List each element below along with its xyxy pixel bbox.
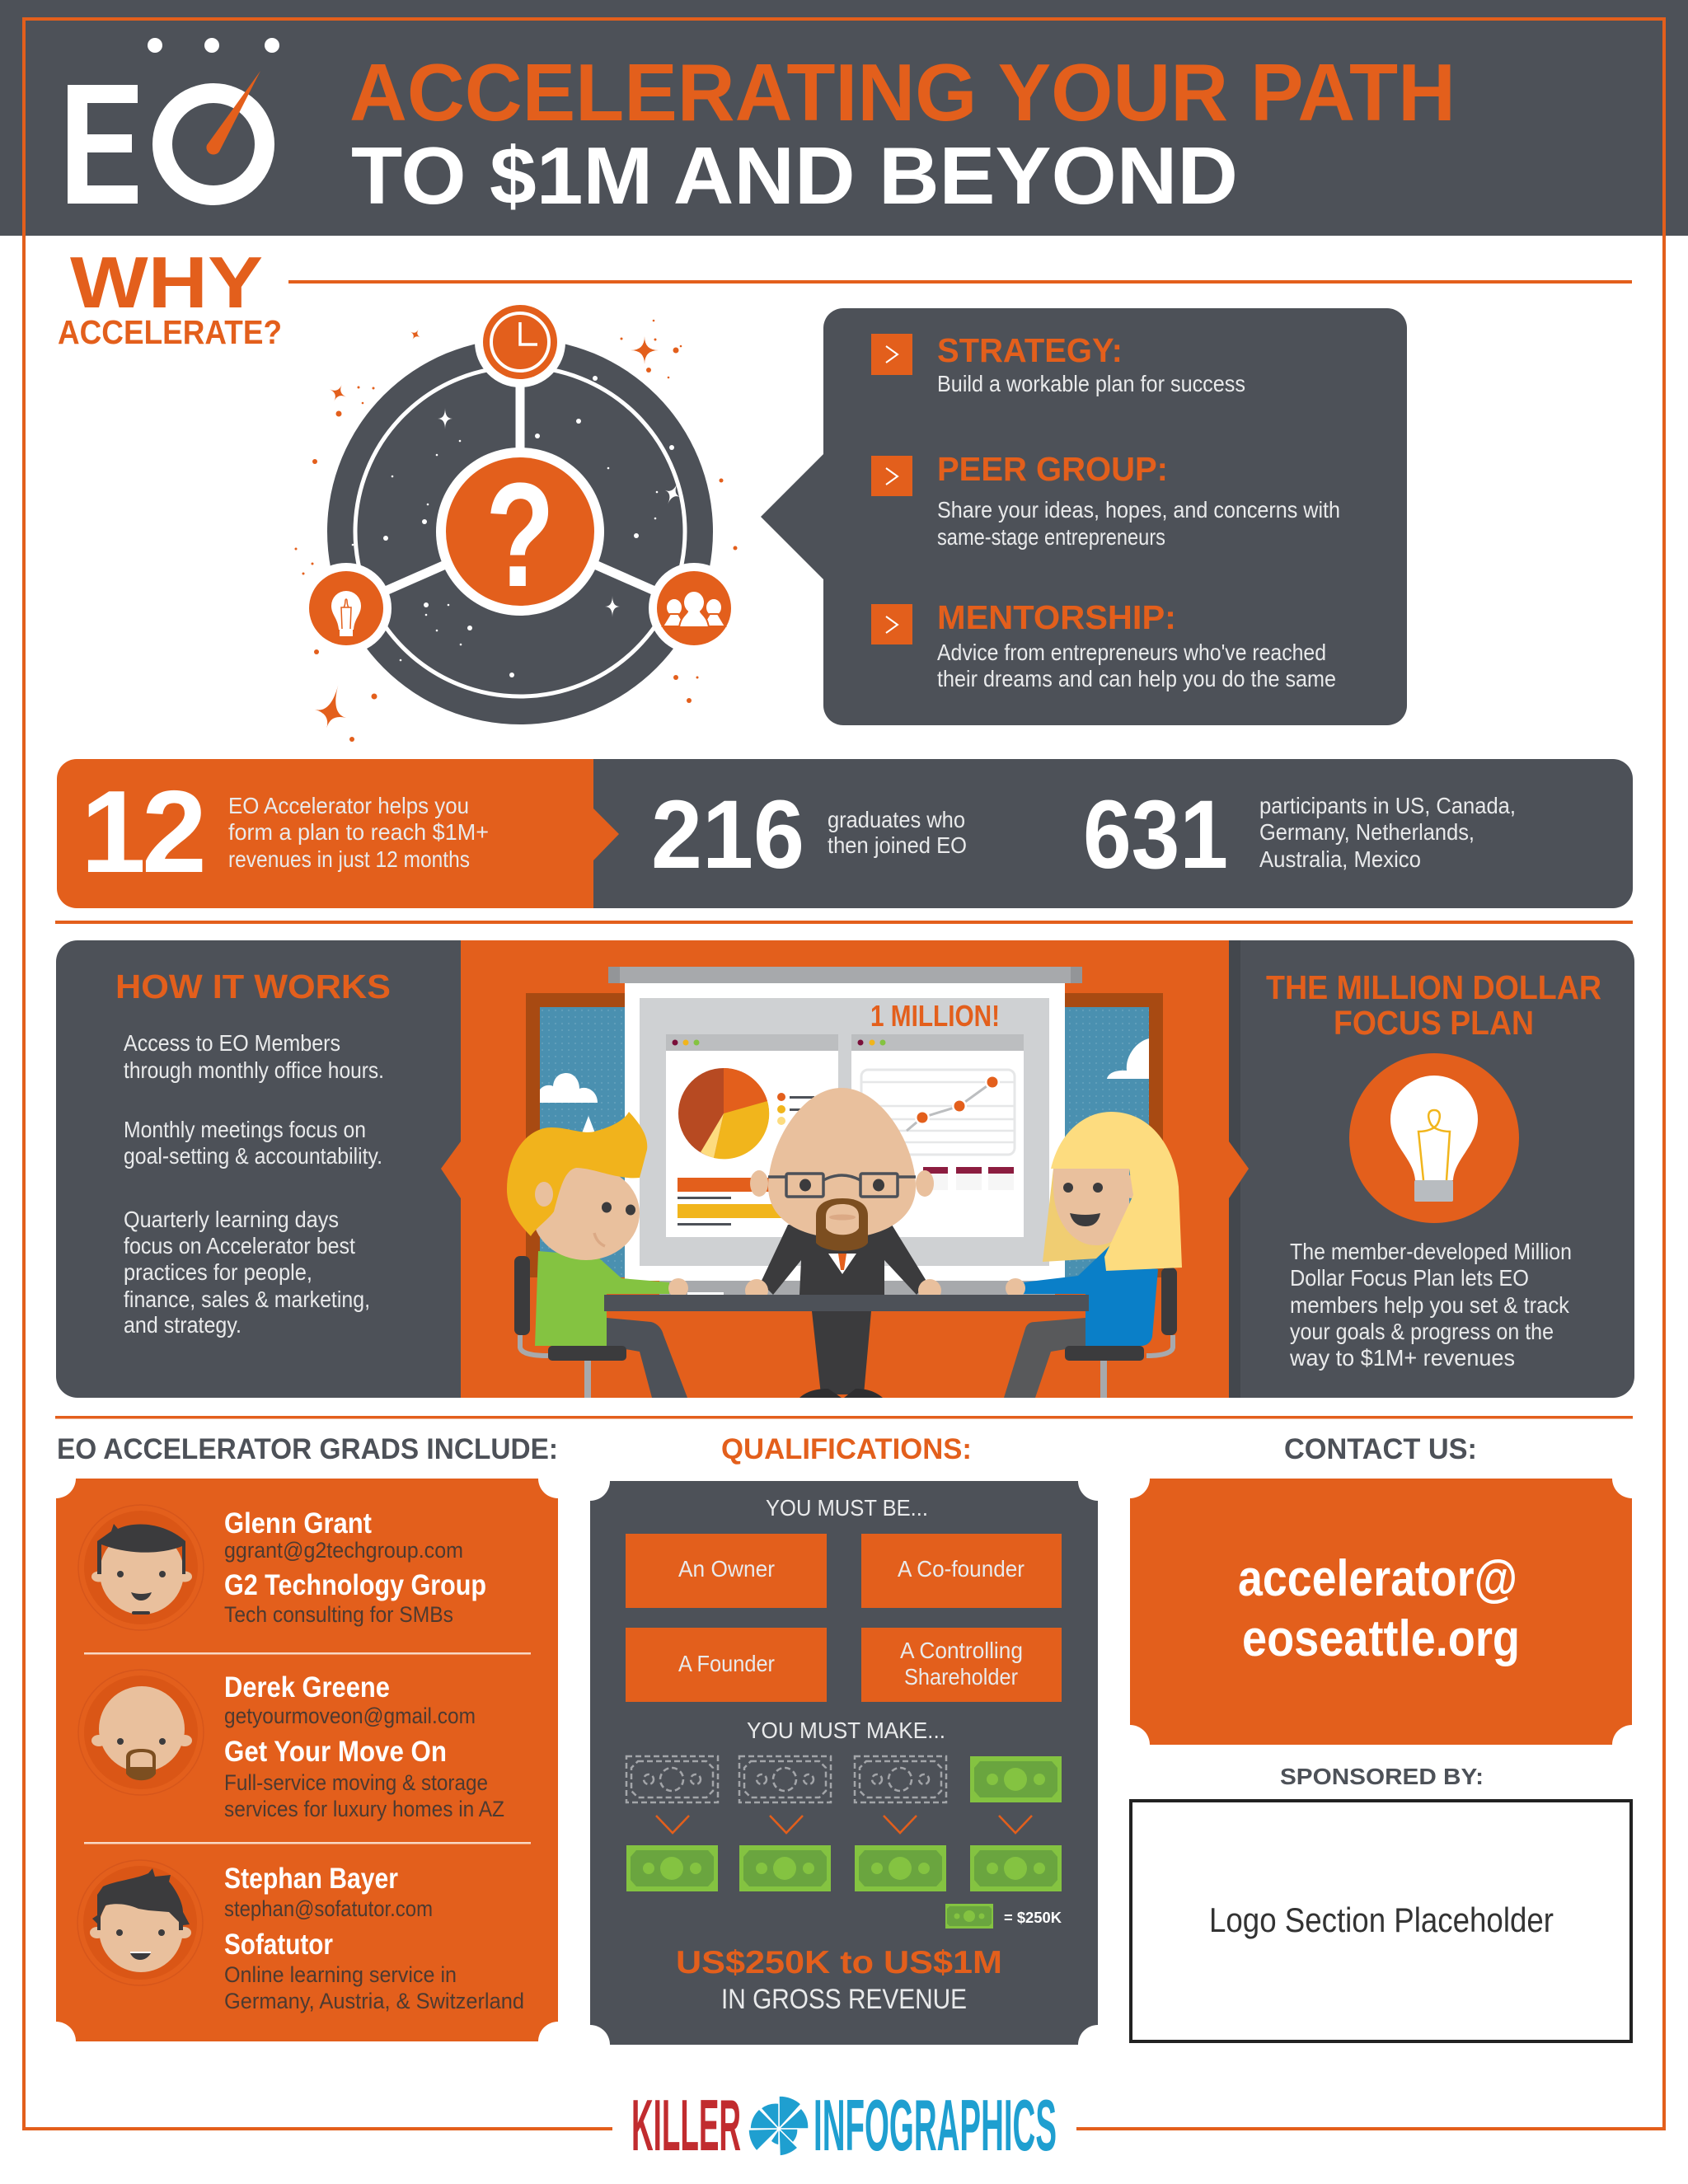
title: ACCELERATING YOUR PATH	[349, 47, 1456, 138]
panel: million dollar focus plan: your goals & progress on the	[1290, 1319, 1554, 1344]
avatar: Derek Greene	[78, 1670, 204, 1795]
panel: contact: accelerator@	[1238, 1550, 1517, 1607]
footer logo: Killer Infographics	[631, 2084, 1057, 2166]
hub diagram	[295, 297, 739, 742]
how it works text: Quarterly learning days	[124, 1207, 339, 1232]
panel: million dollar focus plan: The member-developed Million	[1290, 1239, 1572, 1264]
footer logo: Killer Infographics: KILLER	[631, 2084, 741, 2166]
icon: pinwheel	[748, 2096, 809, 2156]
stat: 631 participants: participants in US, Canada,	[1259, 793, 1516, 818]
heading: why accelerate: ACCELERATE?	[58, 313, 282, 351]
panel: qualifications	[590, 1481, 1098, 2045]
stat: 216 graduates	[651, 780, 967, 889]
text: Glenn Grant: Tech consulting for SMBs	[224, 1602, 453, 1627]
text: Glenn Grant: ggrant@g2techgroup.com	[224, 1538, 463, 1563]
panel: million dollar focus plan: Dollar Focus Plan lets EO	[1290, 1265, 1529, 1291]
stat: 631 participants: 631	[1083, 780, 1228, 889]
panel: million dollar focus plan: way to $1M+ revenues	[1289, 1345, 1515, 1371]
text: Derek Greene: Get Your Move On	[224, 1736, 447, 1768]
stat: 631 participants: Germany, Netherlands,	[1259, 819, 1475, 845]
text: Stephan Bayer: stephan@sofatutor.com	[224, 1896, 433, 1921]
peer group item: Share your ideas, hopes, and concerns with	[937, 497, 1340, 523]
how it works text: finance, sales & marketing,	[124, 1286, 370, 1312]
panel: qualifications: YOU MUST MAKE...	[747, 1718, 945, 1743]
button: an owner: An Owner	[678, 1556, 775, 1582]
pie chart	[678, 1068, 814, 1159]
panel: qualifications: US$250K to US$1M	[676, 1945, 1002, 1980]
center question circle: ?	[485, 452, 555, 618]
panel: qualifications: IN GROSS REVENUE	[721, 1984, 967, 2015]
stat: 631 participants: Australia, Mexico	[1259, 846, 1421, 872]
peer group item: PEER GROUP:	[937, 450, 1168, 488]
projector screen	[608, 967, 1082, 1296]
icon: people	[649, 563, 739, 654]
how it works text: practices for people,	[124, 1259, 312, 1285]
button: co-founder: A Co-founder	[898, 1556, 1025, 1582]
panel: strategy, peer group, mentorship	[761, 308, 1407, 725]
illustration: meeting scene	[441, 940, 1249, 1398]
panel: million dollar focus plan: FOCUS PLAN	[1334, 1004, 1534, 1042]
strategy item	[871, 331, 1245, 396]
header band	[0, 0, 1688, 236]
center question circle	[436, 448, 604, 618]
logo: EO	[68, 38, 279, 204]
avatar: Glenn Grant	[78, 1505, 204, 1630]
button: founder	[626, 1628, 827, 1702]
text: Glenn Grant	[224, 1507, 486, 1627]
panel: million dollar focus plan	[1266, 968, 1601, 1371]
projector screen: 1 MILLION!	[870, 999, 1000, 1033]
bars	[678, 1178, 801, 1226]
button: controlling shareholder: A Controlling	[900, 1638, 1023, 1663]
stat: 216 graduates: graduates who	[828, 807, 965, 832]
calendars	[923, 1167, 1014, 1190]
logo placeholder box	[1131, 1801, 1631, 2041]
panel: million dollar focus plan: members help you set & track	[1290, 1292, 1569, 1318]
panel: contact	[1130, 1479, 1632, 1745]
icon: large bulb	[1349, 1053, 1519, 1223]
button: an owner	[626, 1534, 827, 1608]
panel: how it works band	[56, 940, 1634, 1398]
strategy item: STRATEGY:	[937, 331, 1123, 369]
stat: 216 graduates: 216	[651, 780, 804, 889]
stats bar	[57, 759, 1633, 908]
heading: grads: EO ACCELERATOR GRADS INCLUDE:	[57, 1433, 558, 1465]
button: controlling shareholder: Shareholder	[904, 1664, 1018, 1690]
how it works text: through monthly office hours.	[124, 1057, 384, 1083]
avatar: Stephan Bayer	[77, 1860, 203, 1985]
heading: qualifications: QUALIFICATIONS:	[721, 1433, 972, 1465]
heading: contact: CONTACT US:	[1284, 1433, 1477, 1465]
stat: 631 participants	[1083, 780, 1516, 889]
text: Derek Greene: Full-service moving & storage	[224, 1770, 488, 1795]
how it works text: HOW IT WORKS	[115, 968, 391, 1005]
how it works text: Access to EO Members	[124, 1030, 340, 1056]
mentorship item: their dreams and can help you do the same	[937, 666, 1336, 691]
icon: light bulb	[301, 563, 392, 654]
stat: 12 months	[81, 766, 489, 898]
text: Glenn Grant: G2 Technology Group	[224, 1569, 486, 1601]
text: INFOGRAPHICS	[814, 2084, 1057, 2166]
text: Derek Greene: services for luxury homes in AZ	[224, 1797, 504, 1821]
stat: 12 months: EO Accelerator helps you	[228, 793, 469, 818]
boy	[507, 1112, 724, 1398]
stat: 216 graduates: then joined EO	[828, 832, 967, 858]
text: Stephan Bayer: Stephan Bayer	[224, 1863, 398, 1895]
how it works text: Monthly meetings focus on	[124, 1117, 366, 1142]
panel: qualifications: YOU MUST BE...	[766, 1495, 928, 1521]
mentorship item	[871, 598, 1336, 691]
how it works text: focus on Accelerator best	[124, 1233, 355, 1258]
mentorship item: Advice from entrepreneurs who've reached	[937, 640, 1326, 665]
text: Stephan Bayer: Sofatutor	[224, 1929, 333, 1961]
stat: 12 months: revenues in just 12 months	[228, 846, 470, 872]
text: Derek Greene: getyourmoveon@gmail.com	[224, 1704, 476, 1728]
mentorship item: MENTORSHIP:	[937, 598, 1176, 636]
stat: 12 months: 12	[81, 766, 207, 898]
title: TO $1M AND BEYOND	[351, 130, 1238, 221]
bill legend	[945, 1904, 1062, 1929]
table	[604, 1295, 1089, 1398]
panel: million dollar focus plan: THE MILLION DOLLAR	[1266, 968, 1601, 1006]
stat: 12 months: form a plan to reach $1M+	[228, 819, 489, 845]
how it works text	[115, 968, 391, 1338]
title	[349, 47, 1456, 221]
peer group item: same-stage entrepreneurs	[937, 524, 1165, 550]
man	[745, 1088, 941, 1302]
panel: grads	[56, 1479, 558, 2041]
text: Stephan Bayer	[224, 1863, 524, 2013]
icon: clock	[475, 297, 565, 387]
button: controlling shareholder	[861, 1628, 1062, 1702]
text: Stephan Bayer: Germany, Austria, & Switzerland	[224, 1989, 524, 2013]
text: Derek Greene	[224, 1671, 504, 1821]
how it works text: and strategy.	[124, 1312, 241, 1338]
button: founder: A Founder	[678, 1651, 775, 1676]
peer group item	[871, 450, 1340, 550]
logo placeholder box: Logo Section Placeholder	[1209, 1900, 1554, 1939]
windows	[526, 993, 1163, 1277]
heading: why accelerate	[58, 241, 282, 351]
how it works text: goal-setting & accountability.	[124, 1143, 382, 1169]
panel: contact: eoseattle.org	[1242, 1610, 1520, 1667]
button: co-founder	[861, 1534, 1062, 1608]
text: Stephan Bayer: Online learning service in	[224, 1962, 457, 1987]
strategy item: Build a workable plan for success	[937, 371, 1245, 396]
text: Glenn Grant: Glenn Grant	[224, 1507, 372, 1540]
line chart	[861, 1070, 1015, 1155]
text: Derek Greene: Derek Greene	[224, 1671, 390, 1704]
revenue bills	[626, 1756, 1062, 1891]
woman	[1004, 1112, 1182, 1398]
heading: sponsored by: SPONSORED BY:	[1280, 1764, 1484, 1789]
scattered stars	[295, 320, 737, 742]
bill legend: = $250K	[1004, 1910, 1062, 1926]
heading: why accelerate: WHY	[70, 241, 263, 323]
